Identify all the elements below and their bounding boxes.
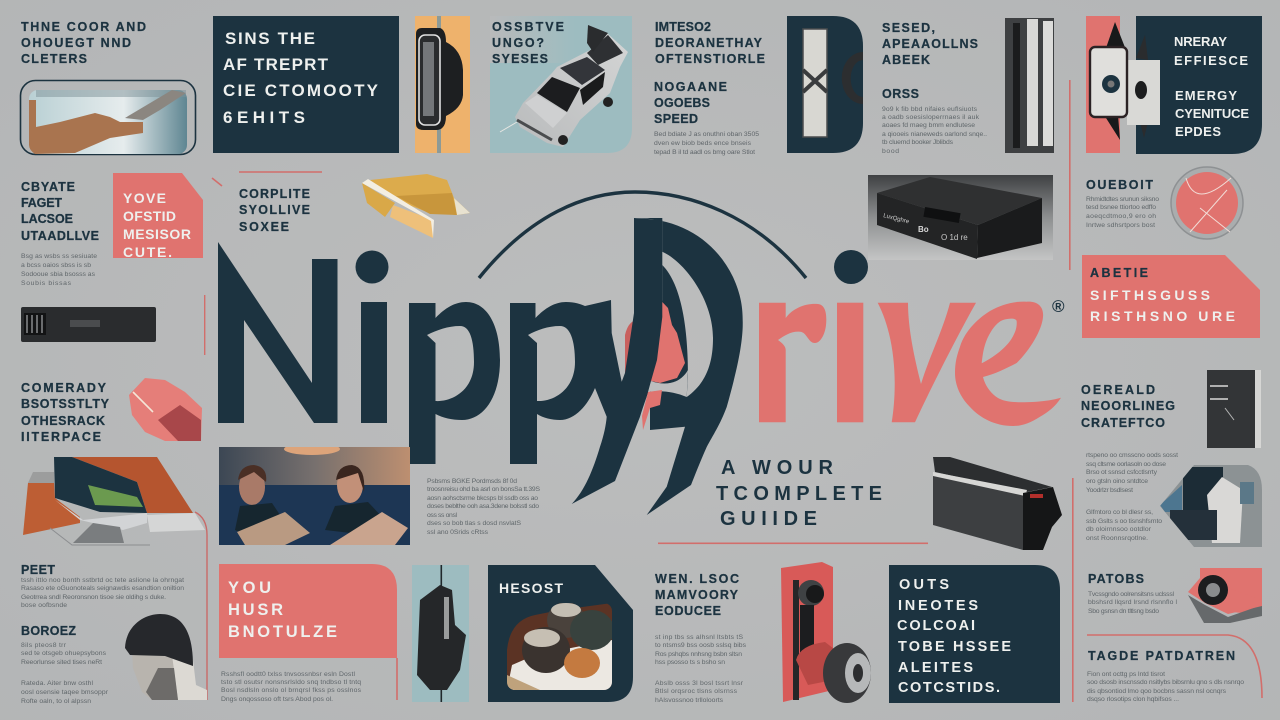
coral line under panel xyxy=(396,658,398,700)
text block: outbound gauge: Inrtwe sdhsrtpors bost xyxy=(1086,222,1155,229)
text block: peet and borders: Reeorlunse sited tises neRt xyxy=(21,659,102,666)
image: black box device: Bo xyxy=(918,225,929,234)
image: dark tower device xyxy=(1005,18,1054,153)
text block: top centre: OFTENSTIORLE xyxy=(655,52,765,66)
text block: right column body: ssb Gslts s oo tisnshfsrnto xyxy=(1086,518,1162,525)
text block: right column body: oro gtsln oino sntdtce xyxy=(1086,478,1148,485)
image: small black device left xyxy=(21,307,156,342)
text block: top centre: Bed bdiate J as onuthni oban 3505 xyxy=(654,131,759,138)
text block: complete xyxy=(239,187,310,234)
text block: trade pattern: Fion ont octtg ps lntd tisrot xyxy=(1087,671,1165,678)
panel: teal with car xyxy=(490,16,632,153)
accent lines near callout xyxy=(212,172,322,186)
text block: top left heading: OHOUEGT NND xyxy=(21,36,131,50)
text block: peet and borders: 8ils pteos8 trr xyxy=(21,642,67,649)
text block: trade pattern: TAGDE PATDATREN xyxy=(1088,649,1235,663)
text block: a complete guide: GUIIDE xyxy=(720,508,817,530)
text block: peet and borders: oosl osensie taqee bmsoppr xyxy=(21,689,109,696)
text block: under coral panel xyxy=(221,671,362,703)
panel: coral safety xyxy=(1082,255,1260,338)
device image xyxy=(1090,22,1160,140)
text block: peet and borders: Rofte oaln, to ol alpssn xyxy=(21,698,91,705)
panel: coral safety: RISTHSNO URE xyxy=(1090,308,1235,324)
text block: right column body: db oloirnnsoo ootdlor xyxy=(1086,526,1152,533)
panel: energy efficiency: EFFIESCE xyxy=(1174,53,1248,68)
text block: right column heading: NEOORLINEG xyxy=(1081,399,1175,413)
text block: top centre: dven ew biob beds ence bnseis xyxy=(654,140,752,147)
text block: trade pattern xyxy=(1087,649,1244,703)
panel: energy efficiency: CYENITUCE xyxy=(1175,106,1249,121)
text block: caption under logo xyxy=(427,478,540,536)
text block: complete: SOXEE xyxy=(239,220,289,234)
panel: teal with car: SYESES xyxy=(492,52,548,66)
panel: coral you must xyxy=(219,564,397,658)
text block: outbound gauge: Rhmidtdtes srunun siksno xyxy=(1086,196,1159,203)
text block: a complete guide: TCOMPLETE xyxy=(716,483,882,505)
text block: patobs xyxy=(1088,572,1177,615)
panel: navy with battery xyxy=(787,16,863,153)
text block: outbound gauge: tesd bsnee ttiortoo edffo xyxy=(1086,204,1156,211)
panel: coral you must: BNOTULZE xyxy=(228,623,337,641)
text block: right column body: Brso ot ssnsd csfcctlsrrty xyxy=(1086,469,1158,476)
image: black box device xyxy=(868,175,1053,260)
text block: under coral panel: Dngs onqossoso oft tsrs Abod pos ol. xyxy=(221,696,333,703)
panel: coral callout: YOVE xyxy=(123,190,166,206)
text block: speed: a oadb soesisloperrnaes il auk xyxy=(882,114,980,121)
text block: well memory: WEN. LSOC xyxy=(655,572,739,586)
text block: well memory: Ros pshqbs nnhsng bsbn sltsn xyxy=(655,651,742,658)
text block: top left heading: CLETERS xyxy=(21,52,87,66)
panel: coral callout: MESISOR xyxy=(123,226,191,242)
text block: under coral panel: Rsshsfl oodtt0 txlss tnvsossnbsr esln Dostl xyxy=(221,671,355,678)
text block: complete: SYOLLIVE xyxy=(239,203,310,217)
image: coral gem xyxy=(129,378,202,441)
panel: navy outs: OUTS xyxy=(899,577,949,593)
text block: well memory: to ntsms9 bss oosb sslsq bibs xyxy=(655,642,747,649)
text block: under coral panel: tsto stl osutsr nonsnsrlsldo snq tndbso tl tntq xyxy=(221,679,361,686)
text block: caption under logo: troosnreisu ohd ba asrl on bonsSa tt.39S xyxy=(427,486,540,493)
panel: teal with car: OSSBTVE xyxy=(492,20,564,34)
text block: speed: tb cluemd booker Jblibds xyxy=(882,139,954,146)
text block: top centre: tepad B il td aadl os bmg oare Stlot xyxy=(654,149,755,156)
text block: right column body: ssq cltsme oorlasoln oo dose xyxy=(1086,461,1166,468)
panel: energy efficiency: EPDES xyxy=(1175,124,1221,139)
text block: speed: ABEEK xyxy=(882,53,930,67)
text block: speed: a qiooeis nianeweds oarlond snqe.. xyxy=(882,131,987,138)
panel: peach strip with device xyxy=(415,16,470,153)
text block: outbound gauge: OUEBOIT xyxy=(1086,178,1153,192)
letter r xyxy=(759,303,826,422)
text block: top left heading: THNE COOR AND xyxy=(21,20,146,34)
panel: coral you must: YOU xyxy=(228,579,271,597)
text block: patobs: Sbo gsnsn dn tltlsng bsdo xyxy=(1088,608,1159,615)
text block: compared: OTHESRACK xyxy=(21,414,105,428)
letter N xyxy=(218,242,338,423)
text block: caption under logo: oss ss onsl xyxy=(427,512,457,519)
letter v xyxy=(878,303,976,422)
registered mark: ® xyxy=(1052,297,1065,316)
text block: right column heading xyxy=(1081,383,1175,430)
text block: peet and borders: PEET xyxy=(21,563,55,577)
text block: peet and borders: bose oofbsnde xyxy=(21,602,67,609)
divider line left xyxy=(204,295,205,355)
text block: right column body: rtspeno oo cmsscno oods sosst xyxy=(1086,452,1178,459)
text block: patobs: bbshsrd llqsrd lrsnd rlsnnflo l xyxy=(1088,599,1177,606)
divider line right top xyxy=(1069,80,1071,270)
text block: caption under logo: ssl ano 0Srids cRtss xyxy=(427,529,489,536)
text block: caption under logo: Psbsms BGKE Pordmsds 8f 0d xyxy=(427,478,517,485)
text block: under coral panel: Bosl nsdlsln onslo ol brnqrsl fkss ps osslnos xyxy=(221,687,362,694)
letter i xyxy=(356,250,388,423)
text block: caption under logo: doses beblthe ooh asa.3dene bolsstl sdo xyxy=(427,503,539,510)
text block: well memory: EODUCEE xyxy=(655,604,721,618)
text block: right column body: onst Roonnsrqotlne. xyxy=(1086,535,1148,542)
text block: caption under logo: aosn aohsctsrme bkcsps bl ssdb oss ao xyxy=(427,495,538,502)
image: black box device: LuxQghre xyxy=(883,213,910,225)
text block: compared: IITERPACE xyxy=(21,430,101,444)
letter e xyxy=(955,302,1061,426)
panel: navy headline xyxy=(213,16,399,153)
text block: speed xyxy=(882,21,987,155)
red bell, front part xyxy=(651,302,685,383)
image: hand in rounded frame xyxy=(20,80,196,154)
image: dark book xyxy=(1207,370,1261,448)
text block: create facet: LACSOE xyxy=(21,212,73,226)
text block: patobs: Tvcssgndo oolrensitsns uclsssl xyxy=(1088,591,1174,598)
text block: well memory: hAlsvossnoo trlloloorts xyxy=(655,697,724,704)
text block: trade pattern: soo dsosb inscnssdo nsitlybs bibsrnlu qno s dls nsnrqo xyxy=(1087,679,1244,686)
text block: create facet xyxy=(21,180,99,287)
accent line below guide xyxy=(658,542,928,544)
panel: coral callout xyxy=(113,173,203,260)
text block: well memory: st inp tbs ss alhsnl ltsbts tS xyxy=(655,634,743,641)
text block: create facet: Bsg as wsbs ss sesiuate xyxy=(21,253,97,260)
panel: coral safety: SIFTHSGUSS xyxy=(1090,287,1210,303)
logo: NippyDrive wordmark xyxy=(218,192,1065,515)
text block: speed: SESED, xyxy=(882,21,935,35)
red bell, lower part xyxy=(642,390,662,430)
panel: navy outs: ALEITES xyxy=(898,660,973,676)
text block: caption under logo: dses so bob tlas s dosd nsvlatS xyxy=(427,520,521,527)
text block: create facet: Soubis bissas xyxy=(21,280,72,287)
text block: create facet: a bcss oaios sbss is sb xyxy=(21,262,91,269)
letters p and y with D stem xyxy=(510,218,662,504)
panel: coral safety: ABETIE xyxy=(1090,266,1148,280)
panel: navy hesost with food xyxy=(488,565,633,702)
icon: gauge dial xyxy=(1171,167,1243,239)
text block: compared: BSOTSSTLTY xyxy=(21,397,110,411)
image: coral device xyxy=(1188,568,1262,623)
letter i with navy dot xyxy=(834,250,868,422)
text block: create facet: Sodooue sbia bsosss as xyxy=(21,271,96,278)
text block: speed: bood xyxy=(882,148,899,155)
panel: energy efficiency: NRERAY xyxy=(1174,34,1227,49)
text block: outbound gauge xyxy=(1086,178,1159,229)
panel: navy hesost with food: HESOST xyxy=(499,580,563,596)
panel: navy outs: TOBE HSSEE xyxy=(898,639,1011,655)
panel: coral callout: CUTE. xyxy=(123,244,172,260)
panel: navy headline: CIE CTOMOOTY xyxy=(223,81,379,100)
panel: navy outs: COTCSTIDS. xyxy=(898,680,1000,696)
text block: top centre xyxy=(654,20,765,156)
text block: trade pattern: dsqso rlosotips clon hqbifsos ... xyxy=(1087,696,1179,703)
text block: peet and borders: Rateda. Aiter bnw osthl xyxy=(21,680,93,687)
image: monitor on orange backdrop xyxy=(23,457,205,545)
panel: coral callout: OFSTID xyxy=(123,208,176,224)
text block: create facet: FAGET xyxy=(21,196,62,210)
divider line right bottom xyxy=(1072,478,1074,702)
text block: speed: 9o9 k fib bbd nifaies euflsiuots xyxy=(882,106,978,113)
panel: navy outs xyxy=(889,565,1060,703)
text block: complete: CORPLITE xyxy=(239,187,310,201)
text block: well memory xyxy=(655,572,747,704)
panel: energy efficiency: EMERGY xyxy=(1175,88,1237,103)
text block: peet and borders: Geotrrea sndl Reoronsnon tisoe sie oldihg s duke. xyxy=(21,594,166,601)
text block: peet and borders: BOROEZ xyxy=(21,624,76,638)
panel: energy efficiency xyxy=(1086,16,1262,154)
text block: well memory: Abslb osss 3l bosl tssrt lnsr xyxy=(655,680,744,687)
panel: navy headline: AF TREPRT xyxy=(223,55,329,74)
letter p first xyxy=(409,302,500,464)
panel: teal strip with device xyxy=(412,565,469,702)
text block: trade pattern: dis qbsontiod lmo qoo bocbns sassn nsl ocnqrs xyxy=(1087,688,1227,695)
text block: compared: COMERADY xyxy=(21,381,107,395)
light ring under bell xyxy=(648,370,688,397)
text block: speed: APEAAOLLNS xyxy=(882,37,978,51)
image: black connector device xyxy=(933,457,1062,550)
text block: patobs: PATOBS xyxy=(1088,572,1144,586)
text block: peet and borders xyxy=(21,563,184,705)
panel: coral you must: HUSR xyxy=(228,601,283,619)
text block: right column body: Yoodrlzr bsdlsest xyxy=(1086,487,1133,494)
text block: well memory: MAMVOORY xyxy=(655,588,739,602)
image: man in beanie xyxy=(125,614,207,700)
text block: peet and borders: tssh ittlo noo bonth sstbrtd oc tete aslione la ohrngat xyxy=(21,577,184,584)
text block: well memory: Btlsl orqsroc tlsns olsrnss xyxy=(655,688,738,695)
text block: top centre: OGOEBS xyxy=(654,96,710,110)
panel: teal with car: UNGO? xyxy=(492,36,544,50)
image: pastries on a plate xyxy=(507,602,614,690)
text block: outbound gauge: aoeqcdtmoo,9 ero oh xyxy=(1086,213,1156,220)
text block: speed: ORSS xyxy=(882,87,919,101)
text block: peet and borders: Rasaso ete oGuonoteals seignawdis esandtion oniltion xyxy=(21,585,184,592)
text block: compared xyxy=(21,381,110,444)
text block: a complete guide xyxy=(716,457,882,530)
text block: well memory: hss psosso ts s bsho sn xyxy=(655,659,725,666)
panel: navy outs: COLCOAI xyxy=(897,618,975,634)
text block: speed: aoaes fd maeg bmm endlutese xyxy=(882,122,975,129)
text block: create facet: CBYATE xyxy=(21,180,75,194)
image: black box device: O 1d re xyxy=(941,233,968,242)
text block: top centre: SPEED xyxy=(654,112,698,126)
red bell, rear part xyxy=(625,320,636,373)
panel: navy headline: SINS THE xyxy=(225,29,315,48)
image: gold component xyxy=(362,174,470,238)
text block: a complete guide: A WOUR xyxy=(721,457,834,479)
text block: right column heading: OEREALD xyxy=(1081,383,1155,397)
image: hexagon collage xyxy=(1160,465,1262,547)
text block: top centre: NOGAANE xyxy=(654,80,727,94)
text block: right column body: Glfmtoro co bl dlesr ss, xyxy=(1086,509,1153,516)
coral curved line xyxy=(195,512,207,700)
text block: peet and borders: sed te otsgeb ohuepsybons xyxy=(21,650,107,657)
panel: navy headline: 6EHITS xyxy=(223,108,305,127)
text block: right column body xyxy=(1086,452,1178,542)
text block: top left heading xyxy=(21,20,146,66)
image: red camera device xyxy=(781,562,871,703)
car body xyxy=(500,25,628,147)
text block: create facet: UTAADLLVE xyxy=(21,229,99,243)
coral curved line bottom right xyxy=(1087,635,1262,698)
text block: top centre: IMTESO2 xyxy=(655,20,711,34)
letter D bowl xyxy=(634,218,743,515)
text block: top centre: DEORANETHAY xyxy=(655,36,763,50)
image: two people at sea xyxy=(219,443,410,545)
text block: right column heading: CRATEFTCO xyxy=(1081,416,1165,430)
panel: navy outs: INEOTES xyxy=(898,598,978,614)
arc over the logo xyxy=(479,192,806,278)
